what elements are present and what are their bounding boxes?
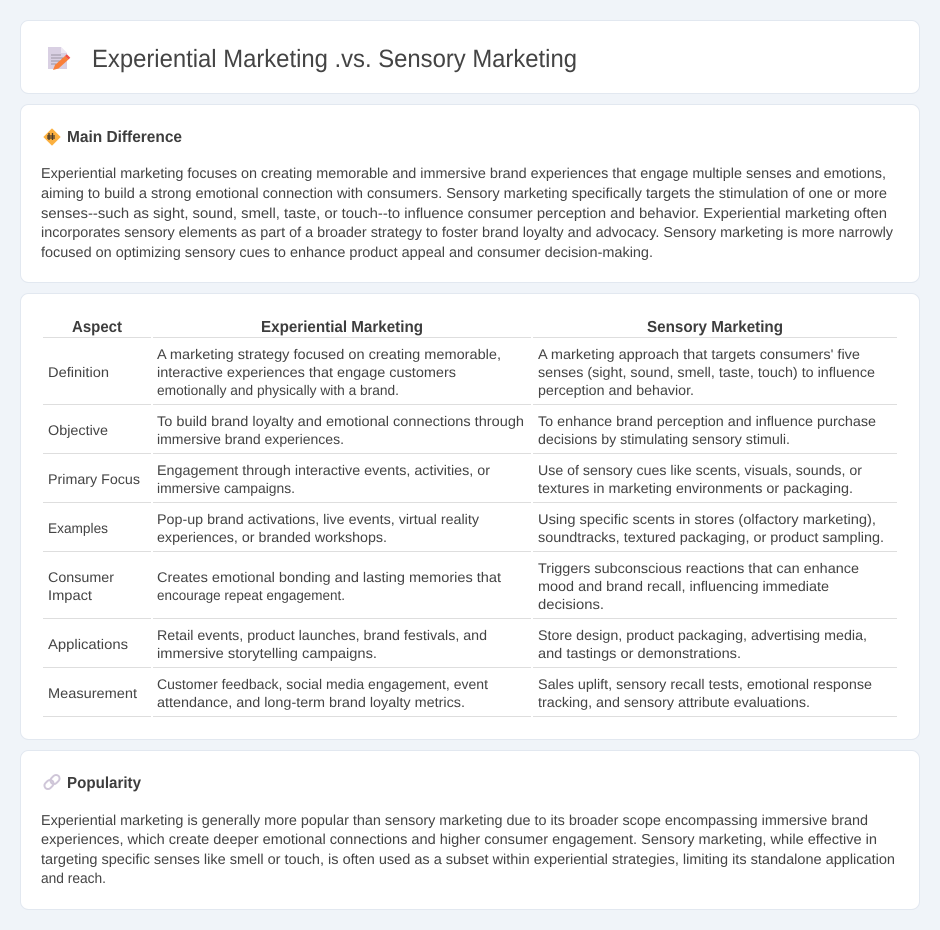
- text block: main difference: incorporates sensory elements as part of a broader strategy to foster brand loyalty and advocacy. Sensory marketing is more narrowly: [41, 225, 894, 241]
- row: applications: and tastings or demonstrations.: [538, 645, 741, 661]
- row: definition: interactive experiences that engage customers: [157, 364, 456, 380]
- text block: main difference: focused on optimizing sensory cues to enhance product appeal and consumer decision-making.: [41, 245, 653, 261]
- row: objective: To build brand loyalty and emotional connections through: [157, 413, 524, 429]
- row: applications: Applications: [48, 636, 128, 652]
- row: consumer impact: Impact: [48, 587, 92, 603]
- table header: Aspect: [72, 319, 123, 336]
- row: examples: [43, 511, 897, 552]
- icon: diamond warning sign: [44, 129, 60, 145]
- row: measurement: Sales uplift, sensory recall tests, emotional response: [538, 676, 872, 692]
- row: consumer impact: encourage repeat engagement.: [157, 587, 345, 603]
- row: primary focus: Use of sensory cues like scents, visuals, sounds, or: [538, 462, 862, 478]
- row: examples: Pop-up brand activations, live events, virtual reality: [157, 511, 479, 527]
- row: primary focus: textures in marketing environments or packaging.: [538, 480, 853, 496]
- icon: chain link: [43, 773, 61, 791]
- row: examples: Examples: [48, 520, 108, 536]
- row: consumer impact: decisions.: [538, 596, 604, 612]
- table header: Experiential Marketing: [261, 319, 423, 336]
- row: examples: Using specific scents in stores (olfactory marketing),: [538, 511, 876, 527]
- row: definition: emotionally and physically with a brand.: [157, 382, 399, 398]
- text block: main difference: aiming to build a strong emotional connection with consumers. Sensory marketing specifically targets the stimulation of one or more: [41, 186, 887, 202]
- row: primary focus: [43, 462, 897, 503]
- table header: Sensory Marketing: [647, 319, 783, 336]
- row: consumer impact: Triggers subconscious reactions that can enhance: [538, 560, 859, 576]
- row: definition: A marketing strategy focused on creating memorable,: [157, 346, 501, 362]
- row: consumer impact: mood and brand recall, influencing immediate: [538, 578, 829, 594]
- row: measurement: tracking, and sensory attribute evaluations.: [538, 694, 810, 710]
- row: applications: [43, 627, 897, 668]
- text block: popularity: [41, 813, 895, 887]
- row: applications: immersive storytelling campaigns.: [157, 645, 377, 661]
- row: consumer impact: Creates emotional bonding and lasting memories that: [157, 569, 501, 585]
- row: definition: perception and behavior.: [538, 382, 694, 398]
- row: objective: decisions by stimulating sensory stimuli.: [538, 431, 790, 447]
- row: measurement: Measurement: [48, 685, 137, 701]
- text block: main difference: Experiential marketing focuses on creating memorable and immersive brand experiences that engage multiple senses and emotions,: [41, 166, 886, 182]
- row: definition: [43, 346, 897, 405]
- text block: main difference: [41, 166, 894, 261]
- text block: popularity: targeting specific senses like smell or touch, is often used as a subset within experiential strategies, limiting its standalone application: [41, 852, 895, 868]
- row: examples: soundtracks, textured packaging, or product sampling.: [538, 529, 884, 545]
- row: objective: To enhance brand perception and influence purchase: [538, 413, 876, 429]
- panel: comparison table: [20, 294, 920, 740]
- row: definition: Definition: [48, 364, 109, 380]
- panel: title header: [20, 20, 920, 94]
- row: objective: [43, 413, 897, 454]
- text block: popularity: experiences, which create deeper emotional connections and higher consumer engagement. Sensory marketing, while effective in: [41, 832, 877, 848]
- row: measurement: [43, 676, 897, 717]
- row: objective: Objective: [48, 422, 108, 438]
- panel: popularity: [20, 750, 920, 910]
- row: primary focus: immersive campaigns.: [157, 480, 295, 496]
- row: primary focus: Engagement through interactive events, activities, or: [157, 462, 490, 478]
- row: consumer impact: [43, 560, 897, 619]
- row: applications: Retail events, product launches, brand festivals, and: [157, 627, 487, 643]
- row: measurement: attendance, and long-term brand loyalty metrics.: [157, 694, 465, 710]
- panel: main difference: [20, 104, 920, 282]
- title: Experiential Marketing .vs. Sensory Marketing: [92, 45, 577, 73]
- row: definition: A marketing approach that targets consumers' five: [538, 346, 860, 362]
- text block: popularity: and reach.: [41, 871, 106, 887]
- row: primary focus: Primary Focus: [48, 471, 140, 487]
- row: objective: immersive brand experiences.: [157, 431, 344, 447]
- row: consumer impact: Consumer: [48, 569, 114, 585]
- text block: main difference: senses--such as sight, sound, smell, taste, or touch--to influence consumer perception and behavior. Experiential marketing often: [41, 206, 887, 222]
- row: definition: senses (sight, sound, smell, taste, touch) to influence: [538, 364, 875, 380]
- row: applications: Store design, product packaging, advertising media,: [538, 627, 867, 643]
- text block: popularity: Experiential marketing is generally more popular than sensory marketing due to its broader scope encompassing immersive brand: [41, 813, 868, 829]
- heading: popularity: Popularity: [67, 775, 141, 792]
- row: examples: experiences, or branded workshops.: [157, 529, 387, 545]
- icon: memo with pencil: [48, 47, 70, 70]
- table header: [43, 319, 897, 338]
- row: measurement: Customer feedback, social media engagement, event: [157, 676, 488, 692]
- heading: main difference: Main Difference: [67, 129, 182, 146]
